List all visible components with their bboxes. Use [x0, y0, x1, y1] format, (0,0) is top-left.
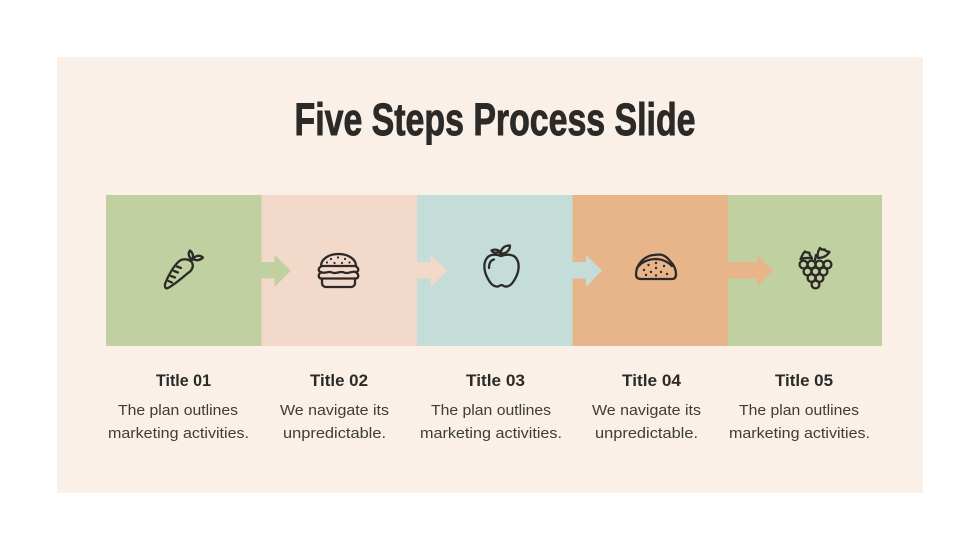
background panel: [57, 57, 923, 493]
step 1 text: [108, 371, 249, 442]
step 4 text: [592, 371, 701, 442]
step 3 text: The plan outlines: [431, 402, 551, 419]
step 4 text: Title 04: [622, 371, 682, 390]
panel: step 2 box: [262, 195, 417, 346]
arrow: step 1 to 2: [261, 255, 291, 287]
step 3 text: [420, 371, 562, 442]
icon: taco: [636, 254, 676, 279]
step 4 text: We navigate its: [592, 402, 701, 419]
arrow: step 3 to 4: [572, 255, 602, 287]
panel: step 1 box: [106, 195, 262, 346]
step 1 text: marketing activities.: [108, 425, 249, 442]
step 5 text: [729, 371, 870, 442]
icon: grapes: [800, 248, 831, 288]
step 2 text: [280, 371, 389, 442]
title: Five Steps Process Slide: [294, 94, 696, 145]
step 2 text: Title 02: [310, 371, 368, 390]
step 2 text: unpredictable.: [283, 425, 386, 442]
arrow: step 4 to 5: [728, 255, 773, 287]
icon: burger: [319, 254, 358, 287]
step 5 text: The plan outlines: [739, 402, 859, 419]
step 2 text: We navigate its: [280, 402, 389, 419]
panel: step 3 box: [417, 195, 572, 346]
step 1 text: Title 01: [156, 371, 211, 390]
arrow: step 2 to 3: [417, 255, 447, 287]
step 5 text: marketing activities.: [729, 425, 870, 442]
icon: apple: [484, 246, 519, 287]
step 1 text: The plan outlines: [118, 402, 238, 419]
icon: carrot: [165, 250, 203, 288]
panel: step 5 box: [728, 195, 882, 346]
step 3 text: Title 03: [466, 371, 525, 390]
step 4 text: unpredictable.: [595, 425, 698, 442]
panel: step 4 box: [572, 195, 728, 346]
step 3 text: marketing activities.: [420, 425, 562, 442]
step 5 text: Title 05: [775, 371, 833, 390]
